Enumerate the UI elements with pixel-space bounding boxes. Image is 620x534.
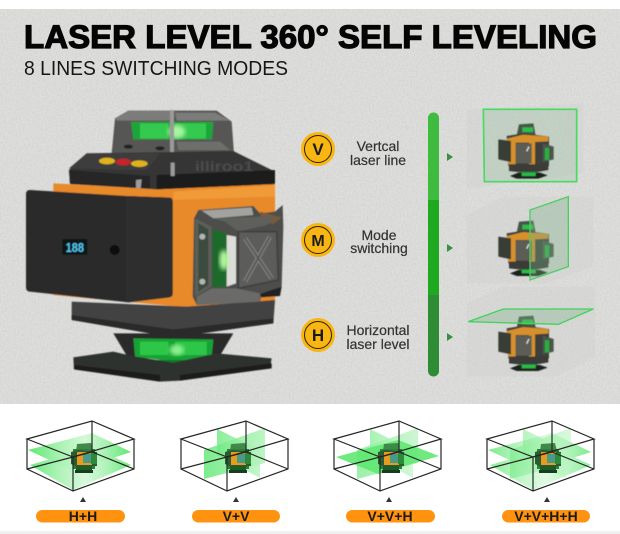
mode diagram V+V+H+H <box>487 421 594 524</box>
bottom white strip <box>0 531 620 534</box>
title: LASER LEVEL 360° SELF LEVELING <box>24 19 597 55</box>
label: mode switching: switching <box>350 240 408 256</box>
textured wall background <box>0 9 620 404</box>
arrow 1 <box>447 153 453 161</box>
mode panel: vertical <box>467 103 583 188</box>
label: mode switching: Mode <box>361 227 397 243</box>
switching laser plane <box>530 197 568 280</box>
device lower block <box>72 300 275 337</box>
horizontal laser plane <box>468 309 593 324</box>
pill label: V+V+H+H <box>514 508 578 524</box>
mode panel: horizontal <box>467 287 595 377</box>
pill label: H+H <box>69 508 97 524</box>
mode panel: switching <box>467 197 593 283</box>
label: horizontal laser level: Horizontal <box>346 322 410 338</box>
mode diagram H+H <box>27 421 134 524</box>
side X module <box>193 205 283 305</box>
pointer <box>80 497 86 502</box>
pointer <box>386 497 392 502</box>
main laser level device <box>26 110 283 382</box>
base plate <box>73 352 272 382</box>
pointer <box>544 497 550 502</box>
feature badge V <box>301 132 335 166</box>
feature badge H: H <box>312 326 324 345</box>
subtitle: 8 LINES SWITCHING MODES <box>24 58 288 80</box>
mode diagram V+V <box>181 421 288 524</box>
label: horizontal laser level: laser level <box>346 336 410 352</box>
control panel top <box>69 151 275 189</box>
pill label: V+V+H <box>367 508 413 524</box>
feature badge H <box>301 318 335 352</box>
feature badge M <box>301 223 335 257</box>
green progress bar <box>428 112 439 376</box>
label: vertical laser line: laser line <box>350 152 406 168</box>
pill label: V+V <box>223 508 250 524</box>
LED display: 188 <box>66 241 84 255</box>
arrow 2 <box>447 244 453 252</box>
vertical laser plane <box>483 109 577 182</box>
feature badge M: M <box>311 233 325 250</box>
arrow 3 <box>447 333 453 341</box>
feature badge V: V <box>312 140 324 159</box>
device orange body <box>53 183 275 307</box>
control panel top: illiroo1 <box>195 158 254 174</box>
mode diagram V+V+H <box>334 421 441 524</box>
top head with laser window <box>112 110 234 153</box>
label: vertical laser line: Vertcal <box>357 138 399 154</box>
pointer <box>233 497 239 502</box>
bottom laser window <box>113 333 233 368</box>
battery case with display <box>26 190 173 302</box>
